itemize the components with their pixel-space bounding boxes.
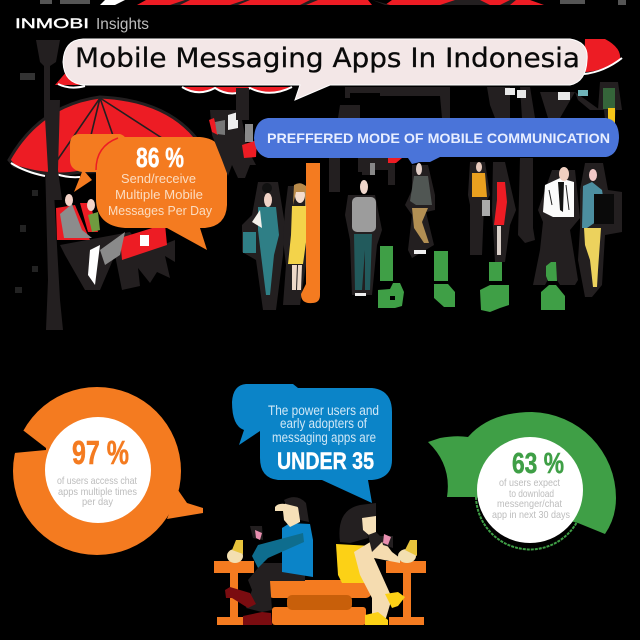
description: of users expect <box>499 477 560 489</box>
bubble text: early adopters of <box>280 416 367 431</box>
bubble text <box>268 403 379 445</box>
person: woman in red dress <box>492 162 516 262</box>
red umbrella <box>9 97 196 200</box>
green bar 4 <box>541 262 565 310</box>
person: man in orange top <box>468 162 490 255</box>
person: woman in yellow dress <box>283 183 313 305</box>
orange bar <box>301 163 320 303</box>
person: woman in blue jacket <box>578 163 622 297</box>
woman <box>336 503 405 625</box>
callout text <box>108 171 212 218</box>
person: man in grey top <box>345 180 382 296</box>
green ring arc <box>476 497 577 549</box>
blue banner <box>254 118 619 164</box>
person: woman in teal dress <box>242 182 285 310</box>
white circle <box>477 437 583 543</box>
seated group under umbrella <box>56 194 175 290</box>
background awning: right umbrella <box>55 39 622 94</box>
percentage: 97 % <box>72 434 129 471</box>
title speech bubble <box>63 39 587 100</box>
food on right table <box>398 540 417 563</box>
illustration: couple on a bench <box>214 497 426 625</box>
right table <box>386 561 426 625</box>
red accent behind banner <box>388 158 402 163</box>
callout text: Send/receive <box>121 171 196 186</box>
silhouettes behind the banner <box>236 87 600 243</box>
food on left table <box>227 540 243 563</box>
description <box>57 475 137 508</box>
description: messenger/chat <box>497 498 562 510</box>
green stat: 63% <box>428 412 616 549</box>
person: green top at right <box>598 82 622 128</box>
left table <box>214 561 254 625</box>
logo: InMobi Insights: INMOBI <box>15 15 89 31</box>
bench <box>268 580 371 625</box>
man <box>225 497 313 625</box>
background seated people <box>209 110 257 178</box>
white circle <box>45 417 151 523</box>
logo: InMobi Insights <box>15 15 149 33</box>
emphasis: under 35: UNDER 35 <box>277 448 374 475</box>
callout figure: 86 % <box>136 142 184 173</box>
bubble text: The power users and <box>268 403 379 418</box>
callout text: Messages Per Day <box>108 203 212 218</box>
orange callout: 86% <box>70 134 227 250</box>
street lamp post <box>15 40 63 330</box>
description: per day <box>82 496 114 508</box>
green bar 3 <box>480 262 509 312</box>
blue speech bubble <box>232 384 392 503</box>
description: of users access chat <box>57 475 137 487</box>
description: app in next 30 days <box>492 509 570 521</box>
bubble text: messaging apps are <box>272 430 376 445</box>
logo: InMobi Insights: Insights <box>96 16 149 33</box>
top strip: cropped umbrellas <box>40 0 626 5</box>
banner heading: PREFFERED MODE OF MOBILE COMMUNICATION <box>267 130 610 146</box>
description: to download <box>509 488 554 500</box>
description: apps multiple times <box>58 486 137 498</box>
description <box>492 477 570 521</box>
person: man jumping, grey jacket <box>405 163 435 258</box>
percentage: 63 % <box>512 448 564 480</box>
callout text: Multiple Mobile <box>115 187 203 202</box>
green bar 2 <box>434 251 455 307</box>
green bar 1 <box>378 246 404 308</box>
person: man in white shirt <box>533 167 580 285</box>
title: Mobile Messaging Apps In Indonesia <box>75 43 580 74</box>
orange stat: 97% <box>6 387 203 555</box>
